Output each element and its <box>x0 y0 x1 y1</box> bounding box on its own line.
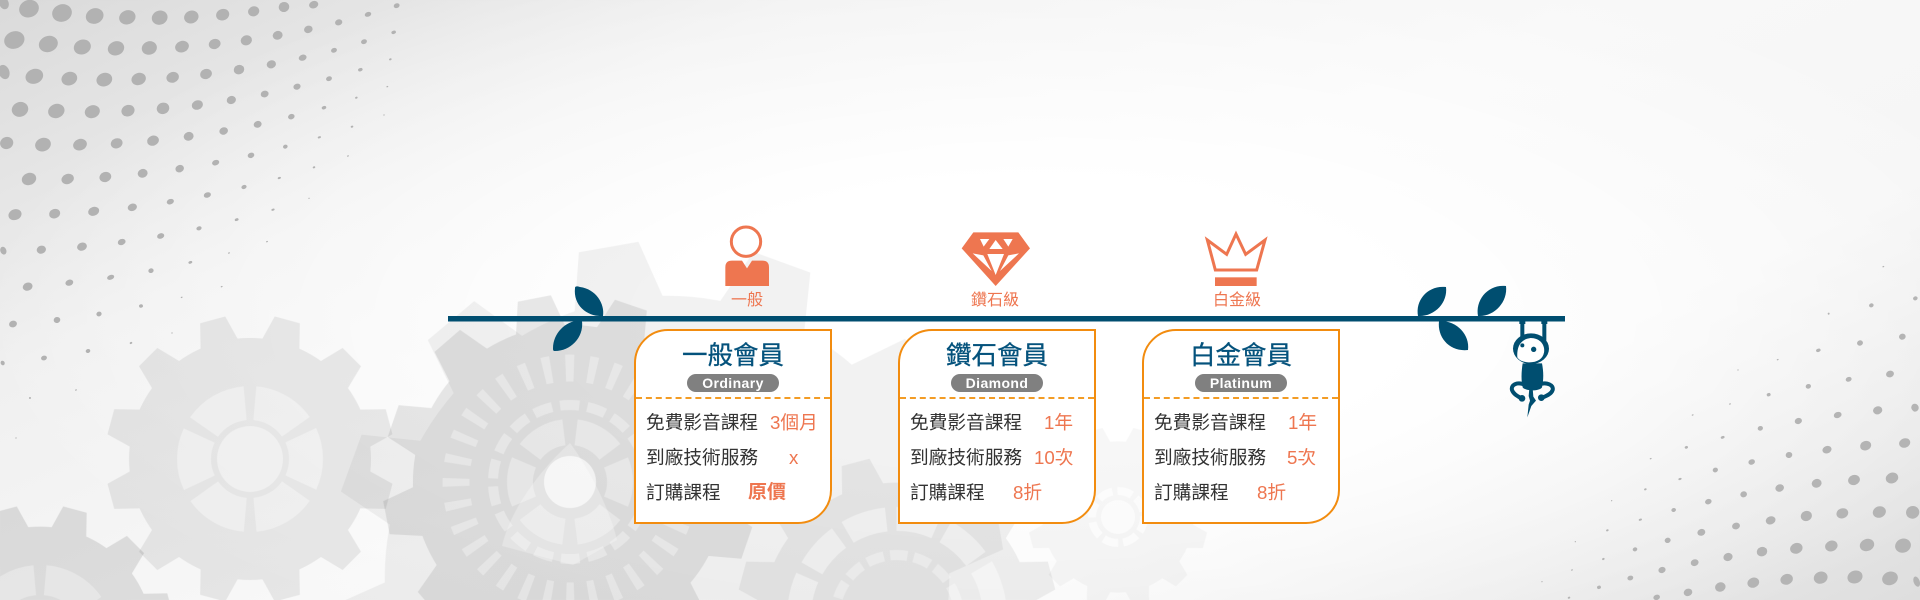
row label: video courses: 免費影音課程 <box>910 412 1022 433</box>
row label: course orders: 訂購課程 <box>910 482 985 503</box>
value: 1 year: 1年 <box>1044 412 1073 433</box>
leaf: left upper <box>575 286 603 316</box>
heading: diamond: 鑽石會員 <box>946 342 1048 370</box>
leaf: right first upper <box>1418 287 1446 316</box>
row label: video courses: 免費影音課程 <box>646 412 758 433</box>
value: 5 times: 5次 <box>1287 447 1316 468</box>
row label: onsite service: 到廠技術服務 <box>646 447 758 468</box>
halftone dots: top left <box>0 0 400 439</box>
badge: Ordinary <box>687 374 779 392</box>
label: 鑽石級: 鑽石級 <box>971 292 1019 309</box>
badge: Platinum: Platinum <box>1210 375 1272 391</box>
badge: Diamond: Diamond <box>966 375 1028 391</box>
icon: monkey <box>1512 320 1553 417</box>
value: full price: 原價 <box>748 482 786 503</box>
panel: platinum member <box>1142 329 1340 524</box>
value: 10 times: 10次 <box>1034 447 1073 468</box>
value: 20 percent off: 8折 <box>1013 482 1042 503</box>
row label: onsite service: 到廠技術服務 <box>910 447 1022 468</box>
row label: course orders: 訂購課程 <box>1154 482 1229 503</box>
row label: onsite service: 到廠技術服務 <box>1154 447 1266 468</box>
panel: diamond member <box>898 329 1096 524</box>
badge: Ordinary: Ordinary <box>702 375 764 391</box>
leaf: right second upper <box>1478 286 1506 316</box>
row label: video courses: 免費影音課程 <box>1154 412 1266 433</box>
value: 3 months: 3個月 <box>770 412 818 433</box>
badge: Diamond <box>951 374 1043 392</box>
label: 一般: 一般 <box>731 292 763 309</box>
vine line <box>448 316 1565 322</box>
value: x: x <box>789 447 798 468</box>
badge: Platinum <box>1195 374 1287 392</box>
leaf: left lower <box>553 321 582 351</box>
heading: platinum: 白金會員 <box>1190 342 1292 370</box>
heading: ordinary: 一般會員 <box>682 342 784 370</box>
row label: course orders: 訂購課程 <box>646 482 721 503</box>
panel: ordinary member <box>634 329 832 524</box>
value: 1 year: 1年 <box>1288 412 1317 433</box>
leaf: right lower <box>1439 321 1468 350</box>
label: 白金級: 白金級 <box>1213 292 1261 309</box>
value: 20 percent off: 8折 <box>1257 482 1286 503</box>
halftone dots: bottom right <box>1541 266 1920 600</box>
